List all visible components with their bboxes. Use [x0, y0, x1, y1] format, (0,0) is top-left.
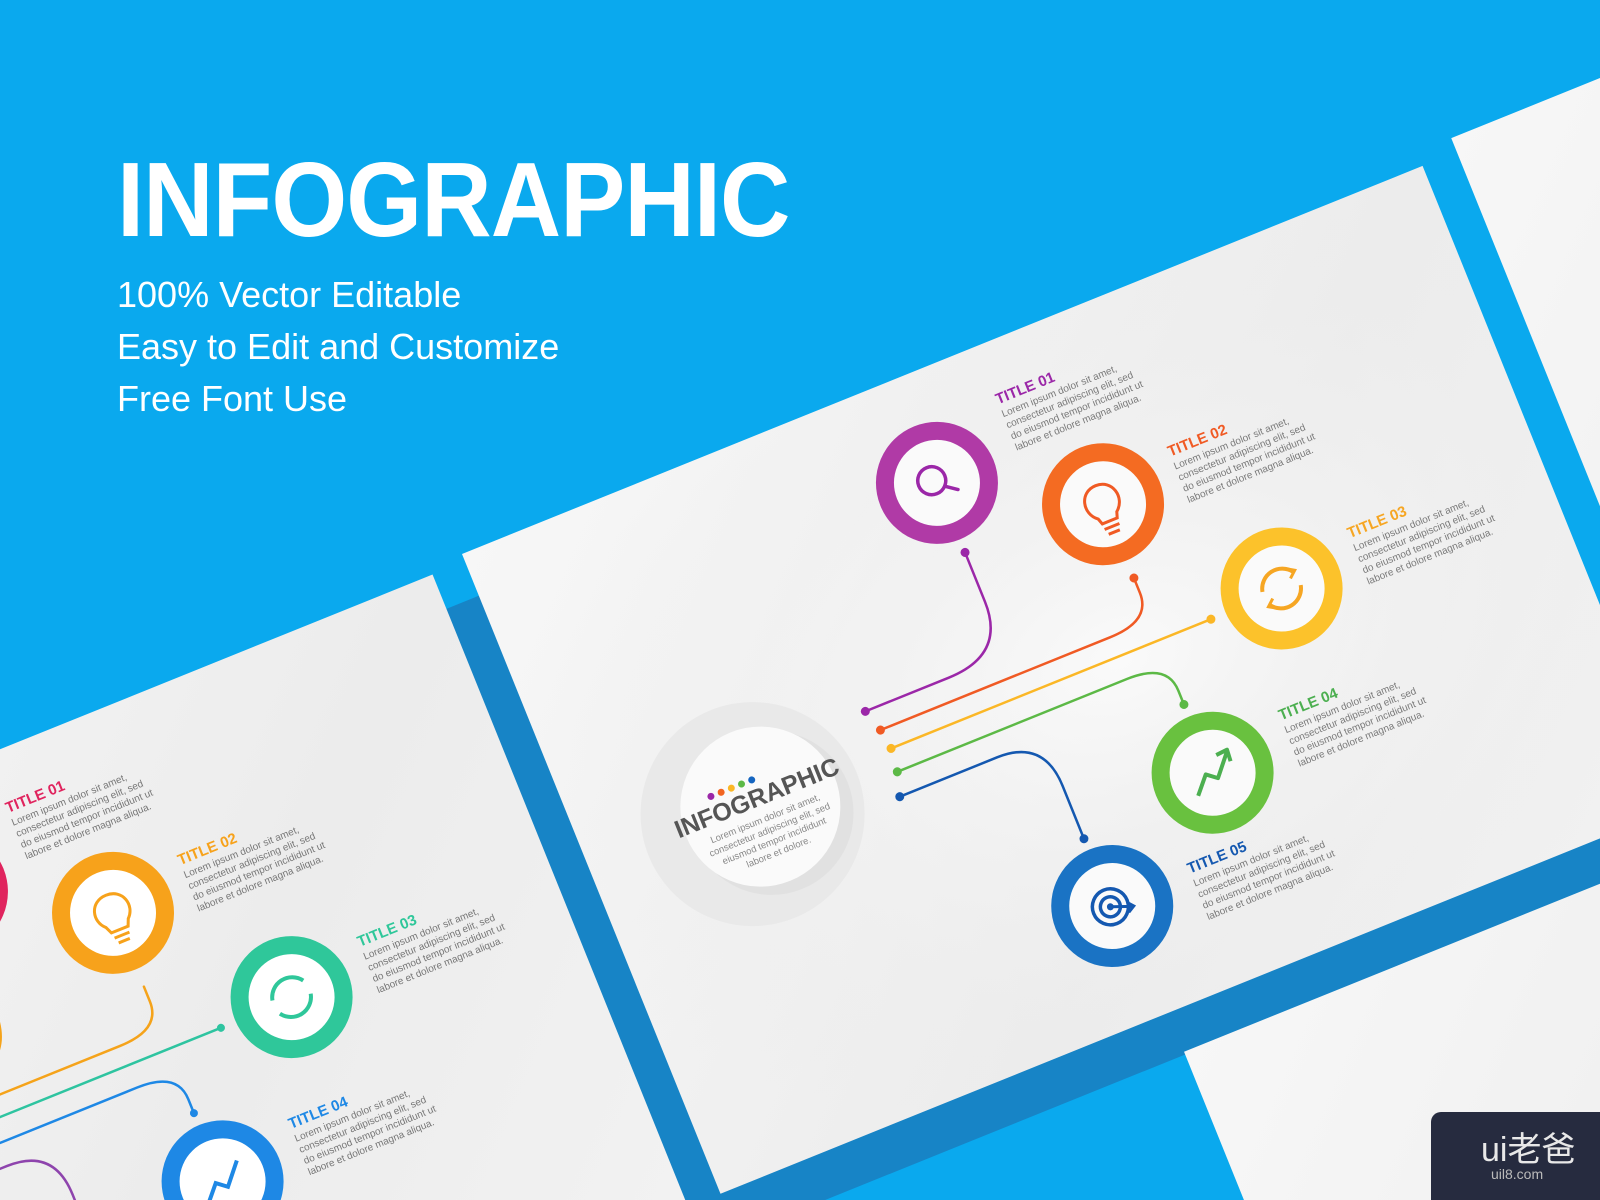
subtitle lines: Easy to Edit and Customize [117, 326, 559, 367]
slide: left partial: TITLE 01 [3, 777, 67, 817]
text blocks: Lorem ipsum dolor sit amet, [1192, 833, 1311, 889]
slide: left partial: do eiusmod tempor incididunt ut [191, 840, 327, 903]
icon circle 5: target [1033, 827, 1192, 985]
text blocks: labore et dolore magna aliqua. [1014, 393, 1143, 453]
text blocks: TITLE 01 [993, 369, 1057, 408]
slide: left partial: labore et dolore magna aliqua. [24, 801, 153, 862]
icon circle 1: search [858, 403, 1016, 562]
text blocks [993, 236, 1595, 924]
icon circle 4: trend [1133, 693, 1292, 852]
slide: left partial: consectetur adipiscing elit, sed [15, 779, 145, 840]
center circle: consectetur adipiscing elit, sed [708, 801, 832, 860]
watermark badge [1431, 1112, 1600, 1200]
text blocks: TITLE 04 [1276, 685, 1341, 724]
slide: left partial: Lorem ipsum dolor sit amet, [293, 1088, 412, 1145]
text blocks: labore et dolore magna aliqua. [1205, 862, 1335, 923]
slide: left partial: labore et dolore magna aliqua. [307, 1117, 436, 1178]
center circle: eiusmod tempor incididunt [721, 815, 828, 867]
subtitle lines: Free Font Use [117, 378, 347, 419]
slide: left partial: do eiusmod tempor incididunt ut [19, 788, 155, 851]
watermark badge: uil8.com [1491, 1166, 1543, 1182]
center circle: labore et dolore. [745, 835, 813, 870]
icon circle 2: bulb [1024, 425, 1182, 584]
slide: left partial [0, 575, 691, 1200]
text blocks: labore et dolore magna aliqua. [1186, 445, 1315, 506]
slide: left partial: labore et dolore magna aliqua. [375, 935, 505, 996]
text blocks: do eiusmod tempor incididunt ut [1181, 431, 1317, 495]
slide: left partial: TITLE 02 [175, 830, 240, 869]
center circle [607, 668, 898, 960]
text blocks: do eiusmod tempor incididunt ut [1009, 379, 1145, 442]
text blocks: labore et dolore magna aliqua. [1365, 527, 1495, 587]
slide: main infographic [462, 166, 1600, 1194]
icon circle 3: refresh [1202, 509, 1361, 668]
slide: left partial: consectetur adipiscing elit, sed [366, 913, 497, 974]
slide: left partial: Lorem ipsum dolor sit amet, [362, 906, 481, 963]
center circle: INFOGRAPHIC [671, 753, 843, 844]
center circle: Lorem ipsum dolor sit amet, [709, 792, 822, 846]
slide: left partial: labore et dolore magna aliqua. [196, 854, 325, 914]
text blocks: do eiusmod tempor incididunt ut [1201, 848, 1337, 912]
text blocks: consectetur adipiscing elit, sed [1005, 370, 1135, 431]
slide: left partial: do eiusmod tempor incididunt ut [371, 922, 507, 985]
text blocks: do eiusmod tempor incididunt ut [1361, 513, 1497, 576]
text blocks: consectetur adipiscing elit, sed [1288, 686, 1418, 747]
text blocks: Lorem ipsum dolor sit amet, [1000, 364, 1119, 420]
subtitle lines [117, 274, 559, 419]
slide: left partial: Lorem ipsum dolor sit amet, [182, 825, 301, 881]
subtitle lines: 100% Vector Editable [117, 274, 461, 315]
slide: left partial: do eiusmod tempor incididunt ut [302, 1104, 438, 1167]
connector lines [824, 476, 1269, 897]
text blocks: labore et dolore magna aliqua. [1297, 709, 1426, 769]
text blocks: consectetur adipiscing elit, sed [1177, 422, 1307, 484]
text blocks: consectetur adipiscing elit, sed [1357, 504, 1487, 565]
slide: left partial: Lorem ipsum dolor sit amet, [10, 772, 129, 829]
slide: left partial: TITLE 03 [355, 911, 419, 951]
slide: left partial: TITLE 04 [286, 1093, 351, 1133]
text blocks: Lorem ipsum dolor sit amet, [1352, 498, 1471, 554]
title: INFOGRAPHIC [117, 141, 790, 259]
watermark badge: ui老爸 [1481, 1131, 1575, 1169]
text blocks: Lorem ipsum dolor sit amet, [1283, 680, 1402, 736]
text blocks: TITLE 03 [1345, 503, 1409, 542]
text blocks: TITLE 02 [1165, 421, 1230, 460]
text blocks: do eiusmod tempor incididunt ut [1292, 695, 1428, 758]
slide: top right blank [1451, 0, 1600, 778]
slide: bottom blank [1184, 664, 1600, 1200]
slide: left partial: consectetur adipiscing elit, sed [298, 1095, 428, 1156]
text blocks: consectetur adipiscing elit, sed [1196, 839, 1327, 901]
text blocks: TITLE 05 [1185, 838, 1249, 877]
text blocks: Lorem ipsum dolor sit amet, [1172, 416, 1291, 472]
slide: left partial: consectetur adipiscing elit, sed [187, 831, 317, 892]
